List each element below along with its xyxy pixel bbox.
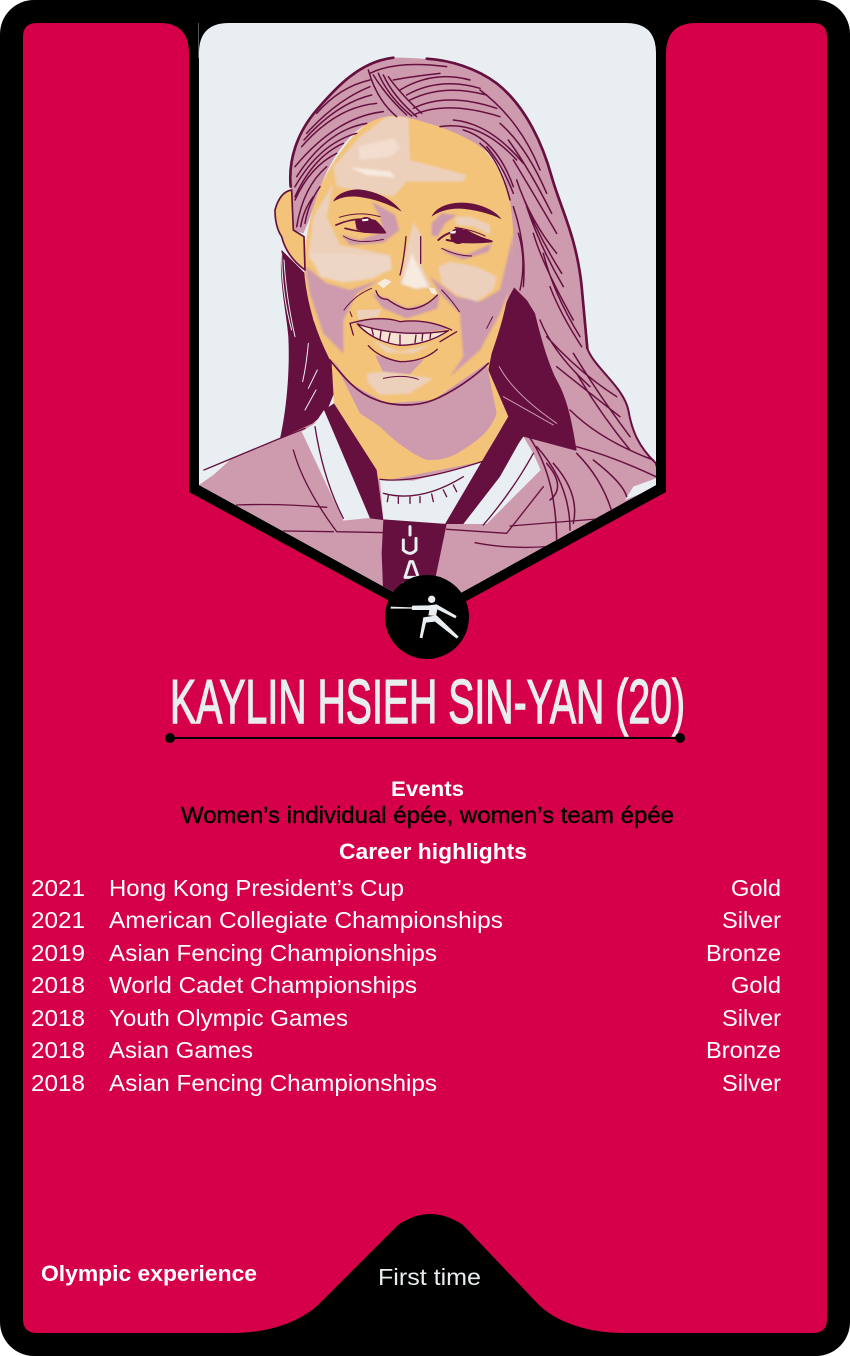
career highlights table — [31, 875, 781, 1096]
row 2018 asian fencing — [31, 1070, 781, 1096]
fencing icon badge — [385, 575, 469, 659]
hair cap — [290, 58, 551, 300]
row 2021 president's cup: Gold — [731, 875, 781, 901]
collar, white shirt and straps — [302, 403, 541, 597]
skin shadows — [305, 117, 513, 377]
row 2019 asian fencing: 2019 — [31, 940, 85, 966]
face shading — [333, 360, 497, 460]
row 2018 world cadet: Gold — [731, 972, 781, 998]
dark hair behind neck, right — [488, 288, 577, 450]
jacket lines — [204, 428, 597, 547]
eyes — [336, 214, 492, 256]
row 2018 youth olympic — [31, 1005, 781, 1031]
face details — [305, 117, 513, 395]
row 2018 asian games — [31, 1037, 781, 1063]
career highlights heading: Career highlights — [339, 839, 527, 864]
olympic experience value: First time — [378, 1264, 481, 1290]
jaw line — [330, 360, 488, 405]
row 2018 asian fencing: Silver — [722, 1070, 781, 1096]
row 2018 asian games: Asian Games — [109, 1037, 253, 1063]
row 2018 asian games: Bronze — [706, 1037, 781, 1063]
portrait illustration — [199, 23, 660, 623]
row 2019 asian fencing — [31, 940, 781, 966]
row 2021 collegiate — [31, 907, 781, 933]
forehead and temple highlights — [333, 117, 467, 197]
row 2021 collegiate: 2021 — [31, 907, 85, 933]
icon: fencer — [391, 596, 459, 639]
highlights on dark hair — [282, 253, 557, 425]
row 2021 collegiate: American Collegiate Championships — [109, 907, 503, 933]
olympic experience label: Olympic experience — [41, 1261, 257, 1286]
row 2019 asian fencing: Bronze — [706, 940, 781, 966]
eyebrows — [333, 189, 402, 212]
hair strands over jacket, right — [523, 437, 656, 543]
frame hairline beside portrait — [198, 23, 200, 58]
row 2018 asian games: 2018 — [31, 1037, 85, 1063]
dark hair, left — [279, 250, 337, 442]
row 2018 world cadet: World Cadet Championships — [109, 972, 417, 998]
row 2021 president's cup: Hong Kong President’s Cup — [109, 875, 404, 901]
events heading: Events — [391, 777, 464, 801]
row 2021 collegiate: Silver — [722, 907, 781, 933]
hair outline — [290, 58, 587, 348]
row 2018 world cadet — [31, 972, 781, 998]
row 2018 asian fencing: 2018 — [31, 1070, 85, 1096]
row 2021 president's cup: 2021 — [31, 875, 85, 901]
skin: neck and face — [304, 115, 513, 482]
row 2019 asian fencing: Asian Fencing Championships — [109, 940, 437, 966]
row 2018 youth olympic: Silver — [722, 1005, 781, 1031]
row 2018 asian fencing: Asian Fencing Championships — [109, 1070, 437, 1096]
chin — [367, 372, 433, 395]
row 2018 youth olympic: 2018 — [31, 1005, 85, 1031]
hair strands — [295, 64, 656, 543]
events text: Women’s individual épée, women’s team épée — [181, 802, 674, 828]
nose — [376, 237, 437, 309]
long hair, right side — [506, 230, 656, 542]
mouth — [357, 309, 382, 319]
row 2018 world cadet: 2018 — [31, 972, 85, 998]
row 2021 president's cup — [31, 875, 781, 901]
ear — [275, 190, 305, 270]
name underline — [165, 733, 685, 743]
row 2018 youth olympic: Youth Olympic Games — [109, 1005, 348, 1031]
jacket — [199, 422, 656, 593]
eye sockets — [342, 202, 399, 245]
